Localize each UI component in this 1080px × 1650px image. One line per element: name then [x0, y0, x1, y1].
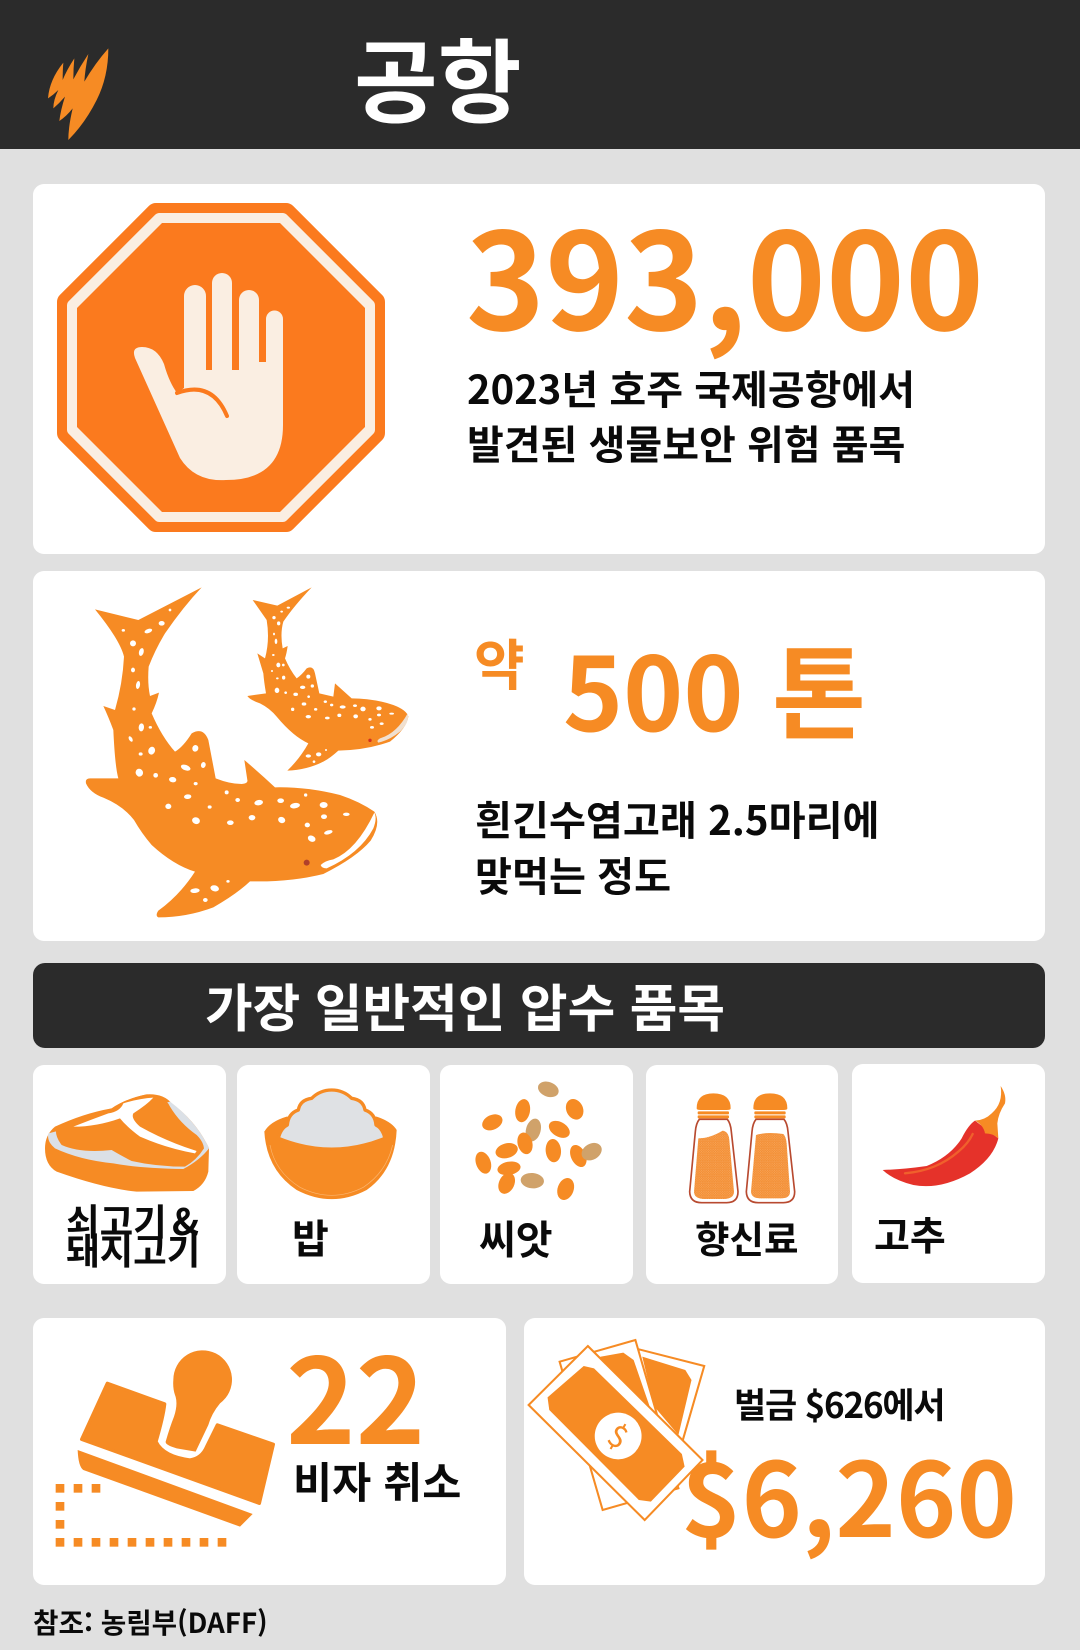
label: 밥: [292, 1207, 329, 1265]
icon: seeds: [473, 1079, 605, 1202]
panel: visas cancelled: [33, 1307, 506, 1585]
panel: seeds: [440, 1065, 633, 1284]
panel: rice: [237, 1065, 430, 1284]
label: 향신료: [695, 1209, 798, 1264]
big number: 393,000: [466, 175, 984, 369]
icon: rice bowl: [264, 1090, 397, 1199]
big number: $6,260: [681, 1418, 1017, 1567]
icon: whale sharks: [86, 587, 408, 917]
title: 공항: [354, 10, 521, 142]
section heading bar: 가장 일반적인 압수 품목: [205, 967, 725, 1042]
section heading bar: [33, 963, 1045, 1048]
big number: 500 tonnes: 500 톤: [563, 614, 866, 761]
description: 2023년 호주 국제공항에서: [467, 358, 915, 416]
fine note: 벌금 $626에서: [734, 1378, 944, 1429]
panel: fines: [524, 1318, 1045, 1585]
panel: 500 tonnes: [33, 571, 1045, 941]
panel: chilli: [852, 1064, 1045, 1283]
source note: 참조: 농림부(DAFF): [33, 1601, 268, 1641]
icon: steak: [45, 1094, 209, 1192]
label: 비자 취소: [293, 1450, 461, 1511]
icon: spice shakers: [690, 1093, 795, 1203]
big number: 22: [286, 1307, 425, 1478]
icon: banknotes: $: [600, 1412, 638, 1458]
panel: spices: [646, 1065, 838, 1284]
label: [66, 1193, 200, 1275]
panel: beef and pork: [33, 1065, 226, 1284]
label: about: 약: [474, 621, 525, 701]
label: 씨앗: [479, 1208, 553, 1266]
logo: orange feather mark: [48, 48, 108, 140]
description: 맞먹는 정도: [475, 844, 671, 903]
icon: stop sign with hand: [67, 213, 375, 522]
label: 쇠고기 &: [66, 1193, 199, 1246]
description: 발견된 생물보안 위험 품목: [467, 413, 905, 471]
description: [467, 358, 915, 471]
description: [475, 788, 880, 903]
icon: banknotes: [529, 1340, 704, 1520]
panel: 393,000 items: [33, 175, 1045, 554]
label: 고추: [874, 1206, 946, 1262]
label: 돼지고기: [66, 1222, 200, 1275]
description: 흰긴수염고래 2.5마리에: [475, 788, 880, 847]
header band: [0, 0, 1080, 149]
icon: red chilli: [883, 1086, 1005, 1186]
icon: rubber stamp: [56, 1350, 273, 1547]
